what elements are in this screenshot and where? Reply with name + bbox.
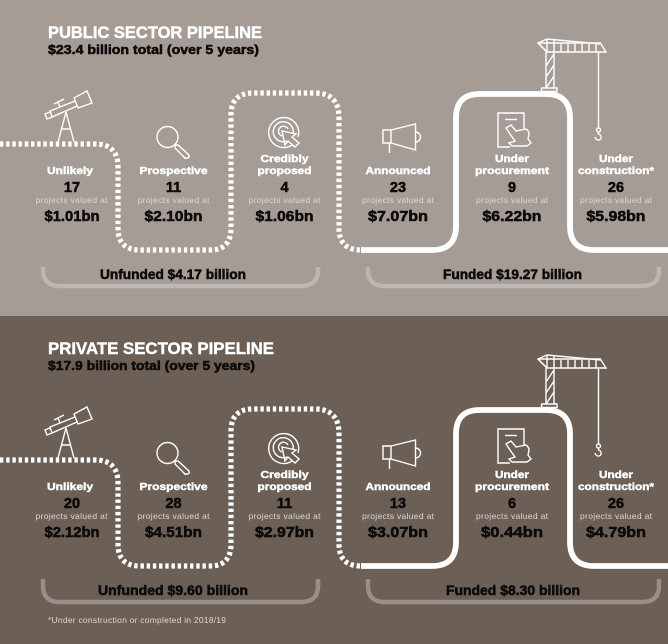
- icon: document with hand: [498, 113, 531, 147]
- stage: credibly proposed: 4: [280, 180, 289, 196]
- stage: under procurement: Under: [495, 153, 529, 165]
- bracket: unfunded total: [43, 267, 318, 286]
- stage: under procurement: Under: [495, 469, 529, 481]
- stage: unlikely: 20: [64, 496, 80, 512]
- icon: magnifying glass: [157, 126, 189, 158]
- stage: under construction: projects valued at: [580, 511, 653, 521]
- stage: under procurement: 9: [508, 180, 516, 196]
- stage: unlikely: [36, 165, 108, 225]
- stage: under construction: Under: [599, 469, 633, 481]
- stage: prospective: projects valued at: [138, 195, 210, 205]
- stage: credibly proposed: projects valued at: [248, 511, 321, 521]
- stage: under procurement: procurement: [475, 481, 550, 493]
- subtitle: public total: $23.4 billion total (over 5 years): [48, 42, 259, 57]
- stage: under construction: $4.79bn: [586, 524, 646, 541]
- bracket: unfunded total: [43, 579, 318, 602]
- title: private sector: PRIVATE SECTOR PIPELINE: [48, 340, 274, 358]
- stage: announced: Announced: [366, 165, 430, 177]
- stage: unlikely: $1.01bn: [44, 208, 100, 225]
- stage: credibly proposed: [248, 153, 321, 225]
- icon: megaphone: [383, 124, 420, 153]
- stage: announced: projects valued at: [362, 511, 435, 521]
- stage: announced: $3.07bn: [368, 524, 428, 541]
- bracket: unfunded total: Unfunded $9.60 billion: [98, 583, 248, 598]
- stage: prospective: [138, 481, 210, 541]
- icon: document with hand: [498, 429, 531, 463]
- stage: under construction: projects valued at: [580, 195, 653, 205]
- stage: under construction: [578, 153, 655, 225]
- solid pipeline: funded stages: [361, 94, 668, 250]
- stage: announced: [362, 481, 435, 541]
- stage: prospective: $4.51bn: [145, 524, 202, 541]
- stage: credibly proposed: proposed: [258, 165, 312, 177]
- stage: under construction: 26: [608, 180, 624, 196]
- stage: under procurement: projects valued at: [476, 195, 549, 205]
- stage: announced: $7.07bn: [368, 208, 428, 225]
- stage: under procurement: 6: [508, 496, 516, 512]
- subtitle: private total: $17.9 billion total (over 5 years): [48, 358, 255, 373]
- icon: megaphone: [383, 440, 420, 469]
- icon: target cursor: [269, 434, 299, 464]
- stage: under construction: $5.98bn: [586, 208, 646, 225]
- stage: under construction: 26: [608, 496, 624, 512]
- icon: magnifying glass: [157, 442, 189, 474]
- stage: under construction: construction*: [578, 165, 655, 177]
- stage: under procurement: procurement: [475, 165, 550, 177]
- stage: under procurement: projects valued at: [476, 511, 549, 521]
- stage: prospective: 28: [165, 496, 182, 512]
- solid pipeline: funded stages: [361, 410, 668, 566]
- bracket: funded total: Funded $8.30 billion: [446, 583, 580, 598]
- stage: prospective: Prospective: [140, 165, 208, 177]
- stage: prospective: 11: [166, 180, 181, 196]
- stage: credibly proposed: $2.97bn: [255, 524, 314, 541]
- stage: under procurement: $6.22bn: [482, 208, 542, 225]
- stage: unlikely: [36, 481, 108, 541]
- stage: prospective: $2.10bn: [144, 208, 202, 225]
- stage: announced: 13: [390, 496, 406, 512]
- panel: private sector pipeline: [0, 340, 668, 625]
- stage: unlikely: $2.12bn: [44, 524, 100, 541]
- panel: public sector pipeline: [0, 24, 668, 286]
- stage: credibly proposed: $1.06bn: [256, 208, 314, 225]
- stage: credibly proposed: proposed: [258, 481, 312, 493]
- icon: crane: [538, 355, 606, 456]
- stage: prospective: Prospective: [140, 481, 208, 493]
- icon: telescope: [45, 91, 92, 142]
- stage: under procurement: [475, 469, 550, 541]
- stage: announced: projects valued at: [362, 195, 435, 205]
- footnote: *Under construction or completed in 2018/19: [48, 615, 226, 625]
- stage: under construction: [578, 469, 655, 541]
- stage: credibly proposed: [248, 469, 321, 541]
- stage: announced: Announced: [366, 481, 430, 493]
- stage: under procurement: [475, 153, 550, 225]
- stage: credibly proposed: Credibly: [260, 469, 309, 481]
- bracket: funded total: [368, 579, 659, 602]
- stage: unlikely: Unlikely: [47, 165, 93, 177]
- bracket: funded total: Funded $19.27 billion: [443, 267, 582, 282]
- stage: under construction: Under: [599, 153, 633, 165]
- stage: under procurement: $0.44bn: [481, 524, 543, 541]
- stage: unlikely: projects valued at: [36, 195, 108, 205]
- bracket: unfunded total: Unfunded $4.17 billion: [100, 267, 246, 282]
- stage: prospective: [138, 165, 210, 225]
- icon: telescope: [45, 407, 92, 458]
- title: public sector: PUBLIC SECTOR PIPELINE: [48, 24, 262, 42]
- stage: unlikely: Unlikely: [47, 481, 93, 493]
- stage: unlikely: projects valued at: [36, 511, 108, 521]
- icon: target cursor: [269, 118, 299, 148]
- stage: prospective: projects valued at: [138, 511, 210, 521]
- icon: crane: [538, 39, 606, 140]
- stage: unlikely: 17: [64, 180, 80, 196]
- stage: credibly proposed: Credibly: [260, 153, 309, 165]
- stage: under construction: construction*: [578, 481, 655, 493]
- stage: announced: 23: [390, 180, 406, 196]
- dotted pipeline: unfunded stages: [0, 93, 361, 250]
- stage: credibly proposed: projects valued at: [248, 195, 321, 205]
- stage: credibly proposed: 11: [277, 496, 292, 512]
- bracket: funded total: [368, 267, 659, 286]
- stage: announced: [362, 165, 435, 225]
- dotted pipeline: unfunded stages: [0, 409, 361, 566]
